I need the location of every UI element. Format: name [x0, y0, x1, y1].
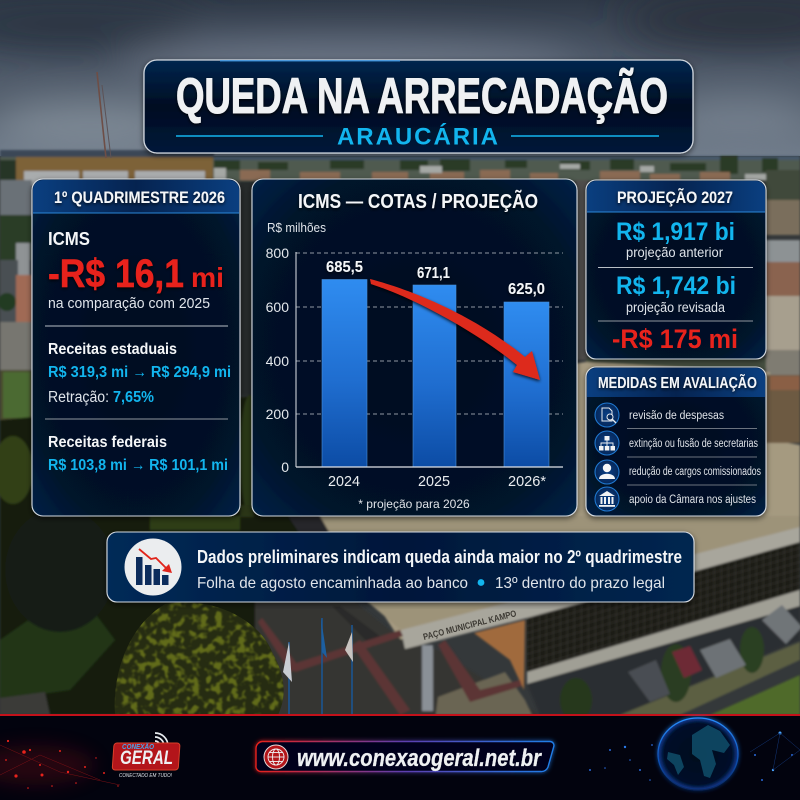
callout details: [197, 575, 665, 592]
decoration: digital globe: [589, 718, 800, 790]
measure 3: redução de cargos comissionados: [629, 466, 761, 478]
ICMS comparison: na comparação com 2025: [48, 295, 210, 312]
bar chart: 0: [281, 459, 289, 475]
callout: preliminary data: [107, 532, 694, 602]
federal revenue block: R$ 103,8 mi → R$ 101,1 mi: [48, 457, 228, 474]
panel: 1º quadrimestre 2026: [32, 179, 240, 516]
revised projection: projeção revisada: [626, 300, 725, 315]
ICMS value: -R$ 16,1: [48, 252, 184, 296]
bar chart: 600: [266, 299, 289, 315]
panel heading: MEDIDAS EM AVALIAÇÃO: [598, 372, 757, 392]
bar chart: 685,5: [326, 259, 363, 276]
bar chart: 671,1: [417, 265, 450, 282]
icon: person: [595, 460, 619, 484]
ICMS label: ICMS: [48, 228, 90, 249]
icon: organisation chart: [595, 431, 619, 455]
state revenue block: R$ 319,3 mi → R$ 294,9 mi: [48, 364, 231, 381]
panel: projeção 2027: [586, 180, 766, 359]
panel: medidas em avaliação: [586, 367, 766, 516]
icon: falling bars: [124, 538, 182, 596]
previous projection: projeção anterior: [626, 245, 723, 260]
chart heading: ICMS — COTAS / PROJEÇÃO: [298, 190, 538, 213]
bar chart: 400: [266, 353, 289, 369]
revised projection: R$ 1,742 bi: [616, 272, 736, 300]
state revenue block: [48, 341, 231, 406]
bar chart: 800: [266, 245, 289, 261]
icon: institution: [595, 487, 619, 511]
logo: Conexão Geral: [112, 733, 180, 779]
icon: document review: [595, 403, 619, 427]
footnote: * projeção para 2026: [358, 497, 470, 511]
arrow: falling trend: [370, 279, 540, 380]
federal revenue block: [48, 434, 228, 474]
state revenue block: Retração:: [48, 389, 109, 406]
panel: title: [144, 60, 693, 153]
logo: Conexão Geral: CONECTADO EM TUDO!: [119, 773, 172, 779]
state revenue block: 7,65%: [113, 389, 154, 406]
footer: [0, 714, 800, 800]
bar chart: 2024: [328, 473, 360, 490]
measure 2: extinção ou fusão de secretarias: [629, 438, 758, 450]
website address: www.conexaogeral.net.br: [297, 745, 542, 772]
previous projection: [616, 218, 735, 260]
ICMS value: mi: [191, 262, 224, 293]
panel heading: PROJEÇÃO 2027: [617, 187, 733, 207]
federal revenue block: Receitas federais: [48, 434, 167, 451]
bar chart: 625,0: [508, 281, 545, 298]
revised projection: [616, 272, 736, 315]
previous projection: R$ 1,917 bi: [616, 218, 735, 246]
bar chart: 2025: [418, 473, 450, 490]
icon: globe: [264, 745, 288, 769]
measure 4: apoio da Câmara nos ajustes: [629, 494, 756, 506]
background: aerial photo of the city hall: PAÇO MUNICIPAL KAMPO: [422, 608, 517, 642]
state revenue block: Receitas estaduais: [48, 341, 177, 358]
panel heading: 1º QUADRIMESTRE 2026: [54, 188, 225, 207]
callout headline: Dados preliminares indicam queda ainda maior no 2º quadrimestre: [197, 547, 682, 567]
panel: ICMS chart: [252, 179, 577, 516]
decoration: red particles: [0, 740, 120, 789]
bar chart: [266, 245, 563, 490]
projection difference: -R$ 175 mi: [612, 324, 738, 354]
subtitle: Araucária: ARAUCÁRIA: [337, 122, 498, 150]
lower-left tree: [115, 602, 284, 715]
callout details: 13º dentro do prazo legal: [495, 575, 665, 592]
callout details: Folha de agosto encaminhada ao banco: [197, 575, 468, 592]
bar chart: 200: [266, 406, 289, 422]
bar chart: 2026*: [508, 473, 546, 490]
logo: Conexão Geral: GERAL: [120, 748, 173, 769]
logo: Conexão Geral: CONEXÃO: [122, 742, 154, 751]
measure 1: revisão de despesas: [629, 410, 724, 422]
unit label: R$ milhões: [267, 220, 326, 235]
website pill: [256, 742, 554, 772]
